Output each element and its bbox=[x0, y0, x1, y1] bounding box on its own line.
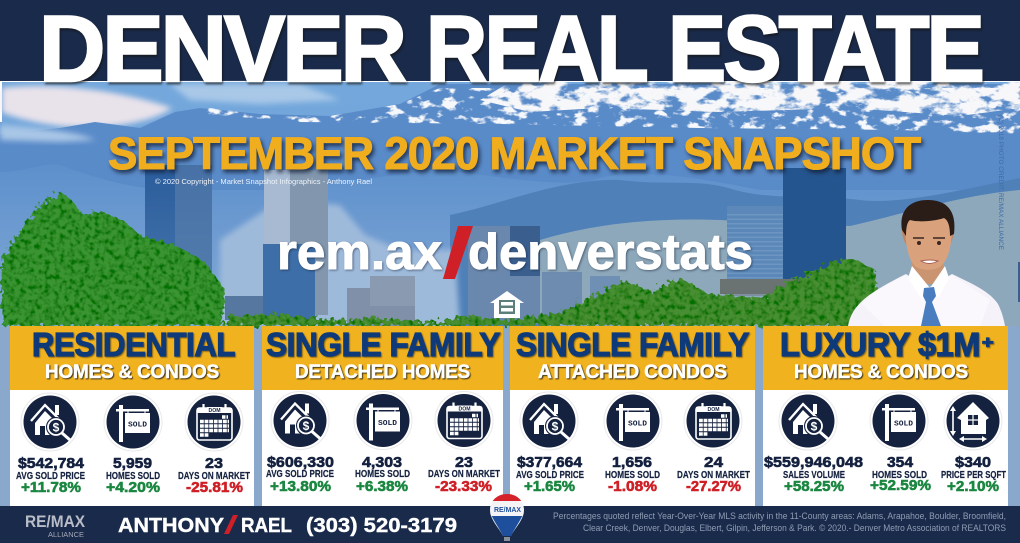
metric: days on market: 24 bbox=[704, 454, 724, 471]
url: rem.ax/denverstats: rem.ax bbox=[277, 224, 442, 280]
heading: single family attached bbox=[516, 326, 749, 383]
man: portrait bbox=[848, 200, 1005, 326]
metric: homes sold bbox=[106, 455, 160, 496]
metric: average sold price bbox=[16, 455, 85, 496]
metric: sales volume bbox=[764, 454, 863, 495]
heading: residential: RESIDENTIAL bbox=[32, 326, 235, 363]
heading: luxury: LUXURY $1M bbox=[780, 326, 980, 363]
logo: RE/MAX Alliance bbox=[25, 513, 85, 539]
heading: residential: HOMES & CONDOS bbox=[45, 362, 219, 383]
building: center blocks bbox=[468, 226, 620, 324]
metric: days on market: 23 bbox=[455, 454, 473, 471]
metric: average sold price: AVG SOLD PRICE bbox=[516, 469, 584, 481]
title bbox=[39, 0, 982, 101]
trees: left bbox=[2, 192, 225, 326]
icon: calendar bbox=[185, 393, 243, 451]
metric: price per square foot bbox=[941, 454, 1006, 495]
metric: homes sold: 4,303 bbox=[362, 454, 402, 471]
metric: average sold price: $542,784 bbox=[18, 455, 85, 472]
metric: days on market: DAYS ON MARKET bbox=[428, 468, 500, 480]
icon: house with price magnifier bbox=[21, 393, 79, 451]
agent name and phone: ANTHONY bbox=[118, 515, 225, 537]
building: twin towers bbox=[225, 170, 328, 320]
heading: single family detached bbox=[266, 326, 500, 383]
heading: single family detached: DETACHED HOMES bbox=[295, 362, 470, 383]
metric: sales volume: SALES VOLUME bbox=[783, 469, 845, 481]
metric: average sold price: $606,330 bbox=[267, 454, 334, 471]
icon: sold sign bbox=[870, 392, 928, 450]
metric: average sold price: AVG SOLD PRICE bbox=[16, 470, 85, 482]
panel: luxury bbox=[763, 326, 1008, 506]
metric: average sold price bbox=[516, 454, 584, 495]
agent name and phone: (303) 520-3179 bbox=[306, 515, 457, 537]
metric: homes sold: 5,959 bbox=[113, 455, 152, 472]
metric: homes sold: -1.08% bbox=[608, 478, 657, 495]
building: mid block bbox=[347, 276, 415, 326]
heading: single family detached: SINGLE FAMILY bbox=[266, 326, 500, 363]
metric: sales volume: $559,946,048 bbox=[764, 454, 863, 471]
icon: sold sign bbox=[354, 392, 412, 450]
icon: house with price magnifier bbox=[520, 392, 578, 450]
metric: days on market bbox=[428, 454, 500, 495]
panel: single family attached bbox=[510, 326, 755, 506]
icon: house with dimensions bbox=[944, 392, 1002, 450]
logo: RE/MAX Alliance: ALLIANCE bbox=[48, 530, 84, 539]
heading: luxury bbox=[780, 326, 994, 383]
metric: price per square foot: +2.10% bbox=[947, 478, 999, 495]
metric: average sold price: AVG SOLD PRICE bbox=[266, 468, 334, 480]
icon: house with price magnifier bbox=[779, 392, 837, 450]
agent name and phone: RAEL bbox=[241, 515, 292, 537]
metric: days on market bbox=[178, 455, 250, 496]
metric: homes sold: +6.38% bbox=[356, 478, 408, 495]
photo: Denver skyline with mountains bbox=[0, 81, 1020, 326]
metric: days on market: DAYS ON MARKET bbox=[178, 470, 250, 482]
metric: average sold price: $377,664 bbox=[517, 454, 583, 471]
icon: sold sign bbox=[104, 393, 162, 451]
metric: average sold price: +1.65% bbox=[524, 478, 575, 495]
agent name and phone bbox=[118, 515, 457, 537]
icon: sold sign bbox=[604, 392, 662, 450]
icon: equal housing opportunity bbox=[490, 291, 524, 318]
metric: average sold price bbox=[266, 454, 334, 495]
building: striped tower bbox=[727, 206, 799, 296]
photo credit: (C) 2018 PHOTO CREDIT: RE/MAX ALLIANCE bbox=[997, 115, 1004, 251]
metric: homes sold: HOMES SOLD bbox=[106, 470, 160, 482]
heading: luxury: + bbox=[982, 333, 994, 352]
logo: RE/MAX balloon bbox=[490, 494, 524, 541]
metric: days on market: 23 bbox=[205, 455, 223, 472]
building: dark glass tower bbox=[783, 168, 846, 283]
metric: average sold price: +13.80% bbox=[270, 478, 331, 495]
metric: homes sold: HOMES SOLD bbox=[355, 468, 410, 480]
metric: price per square foot: $340 bbox=[955, 454, 991, 471]
logo: RE/MAX balloon: RE/MAX bbox=[494, 507, 521, 514]
metric: sales volume: +58.25% bbox=[784, 478, 844, 495]
metric: homes sold bbox=[605, 454, 660, 495]
logo: RE/MAX Alliance: RE/MAX bbox=[25, 513, 85, 531]
icon: calendar bbox=[684, 392, 742, 450]
metric: homes sold: +52.59% bbox=[870, 477, 931, 494]
heading: single family attached: SINGLE FAMILY bbox=[516, 326, 749, 363]
metric: days on market bbox=[677, 454, 750, 495]
metric: homes sold: +4.20% bbox=[106, 479, 160, 496]
trees: center bbox=[222, 258, 880, 326]
metric: homes sold bbox=[870, 454, 931, 494]
subtitle: market snapshot: SEPTEMBER 2020 MARKET SNAPSHOT bbox=[108, 128, 920, 179]
footer band bbox=[0, 506, 1020, 543]
metric: homes sold: HOMES SOLD bbox=[605, 469, 660, 481]
icon: calendar bbox=[435, 392, 493, 450]
heading: luxury: HOMES & CONDOS bbox=[794, 362, 968, 383]
metric: days on market: DAYS ON MARKET bbox=[677, 469, 750, 481]
metric: homes sold bbox=[355, 454, 410, 495]
header band bbox=[0, 0, 1020, 81]
metric: homes sold: HOMES SOLD bbox=[872, 469, 927, 481]
url: rem.ax/denverstats: denverstats bbox=[468, 224, 753, 280]
metric: homes sold: 354 bbox=[887, 454, 914, 471]
panel: single family detached bbox=[262, 326, 503, 506]
building: left tower bbox=[145, 165, 212, 300]
metric: average sold price: +11.78% bbox=[21, 479, 81, 496]
metric: homes sold: 1,656 bbox=[612, 454, 652, 471]
copyright line: © 2020 Copyright - Market Snapshot Infographics - Anthony Rael bbox=[155, 177, 372, 186]
metric: days on market: -23.33% bbox=[435, 478, 492, 495]
metric: days on market: -25.81% bbox=[186, 479, 243, 496]
url: rem.ax/denverstats bbox=[277, 224, 753, 280]
heading: residential bbox=[32, 326, 235, 383]
panel: residential bbox=[10, 326, 254, 506]
footnote bbox=[553, 511, 1006, 534]
metric: days on market: -27.27% bbox=[686, 478, 741, 495]
heading: single family attached: ATTACHED CONDOS bbox=[538, 362, 727, 383]
icon: house with price magnifier bbox=[271, 392, 329, 450]
